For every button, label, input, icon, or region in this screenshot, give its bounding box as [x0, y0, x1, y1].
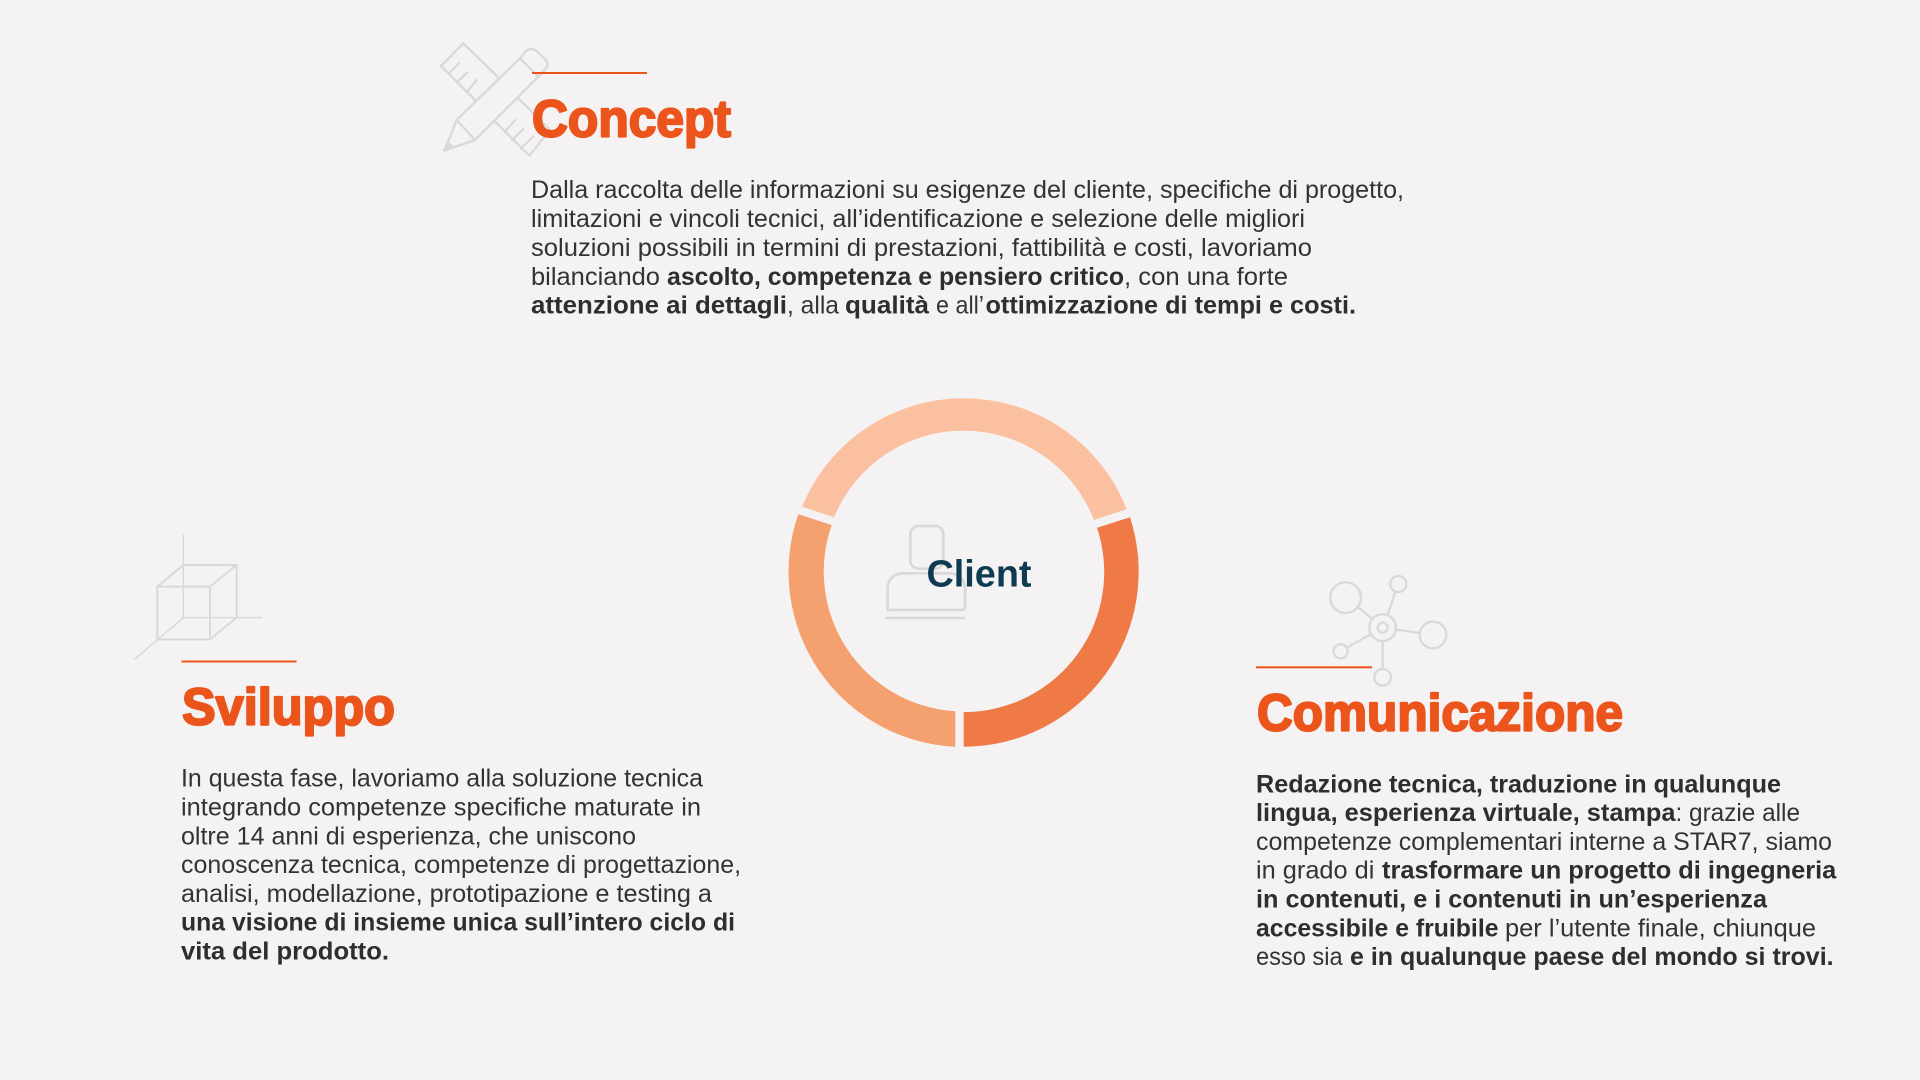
text block: Comunicazione: in grado di — [1256, 857, 1374, 885]
heading rule — [1256, 666, 1372, 668]
panel: Sviluppo — [181, 660, 741, 966]
donut chart: client cycle — [789, 398, 1139, 747]
text block: Concept: qualità — [845, 292, 929, 320]
segment: Comunicazione — [964, 517, 1139, 747]
text block: Concept: e all’ — [936, 292, 984, 320]
text block: Comunicazione: per l’utente finale, chiunque — [1505, 914, 1816, 942]
text block: Sviluppo: una visione di insieme unica sull’intero ciclo di — [181, 909, 735, 937]
text block: Concept: bilanciando — [531, 263, 660, 291]
text block: Comunicazione: trasformare un progetto di ingegneria — [1382, 857, 1837, 885]
icon: ruler and pencil — [441, 43, 550, 156]
label: Client: Client — [926, 554, 1032, 596]
text block: Sviluppo: integrando competenze specifiche maturate in — [181, 794, 701, 822]
text block: Sviluppo: analisi, modellazione, prototipazione e testing a — [181, 880, 712, 908]
text block: Concept: , con una forte — [1124, 263, 1288, 291]
text block: Sviluppo: In questa fase, lavoriamo alla soluzione tecnica — [181, 765, 703, 793]
heading rule — [532, 72, 647, 74]
panel: Concept — [531, 72, 1404, 320]
heading: Sviluppo: Sviluppo — [182, 678, 395, 736]
text block: Comunicazione: competenze complementari interne a STAR7, siamo — [1256, 828, 1832, 856]
heading: Comunicazione: Comunicazione — [1257, 684, 1623, 742]
text block: Comunicazione: esso sia — [1256, 943, 1343, 971]
text block: Sviluppo: conoscenza tecnica, competenze di progettazione, — [181, 851, 741, 879]
heading: Concept: Concept — [532, 90, 731, 148]
icon: person — [887, 526, 965, 618]
text block: Concept: ascolto, competenza e pensiero critico — [667, 263, 1124, 291]
segment: Sviluppo — [789, 514, 955, 747]
text block: Concept: soluzioni possibili in termini di prestazioni, fattibilità e costi, lavoriamo — [531, 234, 1312, 262]
icon: cube — [135, 535, 262, 659]
panel: Comunicazione — [1256, 666, 1837, 971]
text block: Comunicazione: in contenuti, e i contenuti in un’esperienza — [1256, 886, 1768, 914]
text block: Sviluppo — [181, 765, 741, 966]
text block: Concept — [531, 176, 1404, 320]
text block: Comunicazione: e in qualunque paese del mondo si trovi. — [1350, 943, 1834, 971]
text block: Comunicazione: lingua, esperienza virtuale, stampa — [1256, 799, 1677, 827]
text block: Sviluppo: vita del prodotto. — [181, 938, 389, 966]
text block: Sviluppo: oltre 14 anni di esperienza, che uniscono — [181, 822, 636, 850]
text block: Concept: limitazioni e vincoli tecnici, all’identificazione e selezione delle migliori — [531, 205, 1305, 233]
text block: Concept: ottimizzazione di tempi e costi. — [986, 292, 1356, 320]
segment: Concept — [802, 398, 1127, 520]
text block: Comunicazione — [1256, 770, 1837, 971]
text block: Comunicazione: : grazie alle — [1676, 799, 1800, 827]
heading rule — [182, 660, 296, 662]
text block: Comunicazione: Redazione tecnica, traduzione in qualunque — [1256, 770, 1781, 798]
text block: Concept: attenzione ai dettagli — [531, 292, 787, 320]
icon: molecule network — [1330, 576, 1446, 686]
text block: Concept: , alla — [787, 292, 839, 320]
text block: Concept: Dalla raccolta delle informazioni su esigenze del cliente, specifiche di progetto, — [531, 176, 1404, 204]
text block: Comunicazione: accessibile e fruibile — [1256, 914, 1499, 942]
